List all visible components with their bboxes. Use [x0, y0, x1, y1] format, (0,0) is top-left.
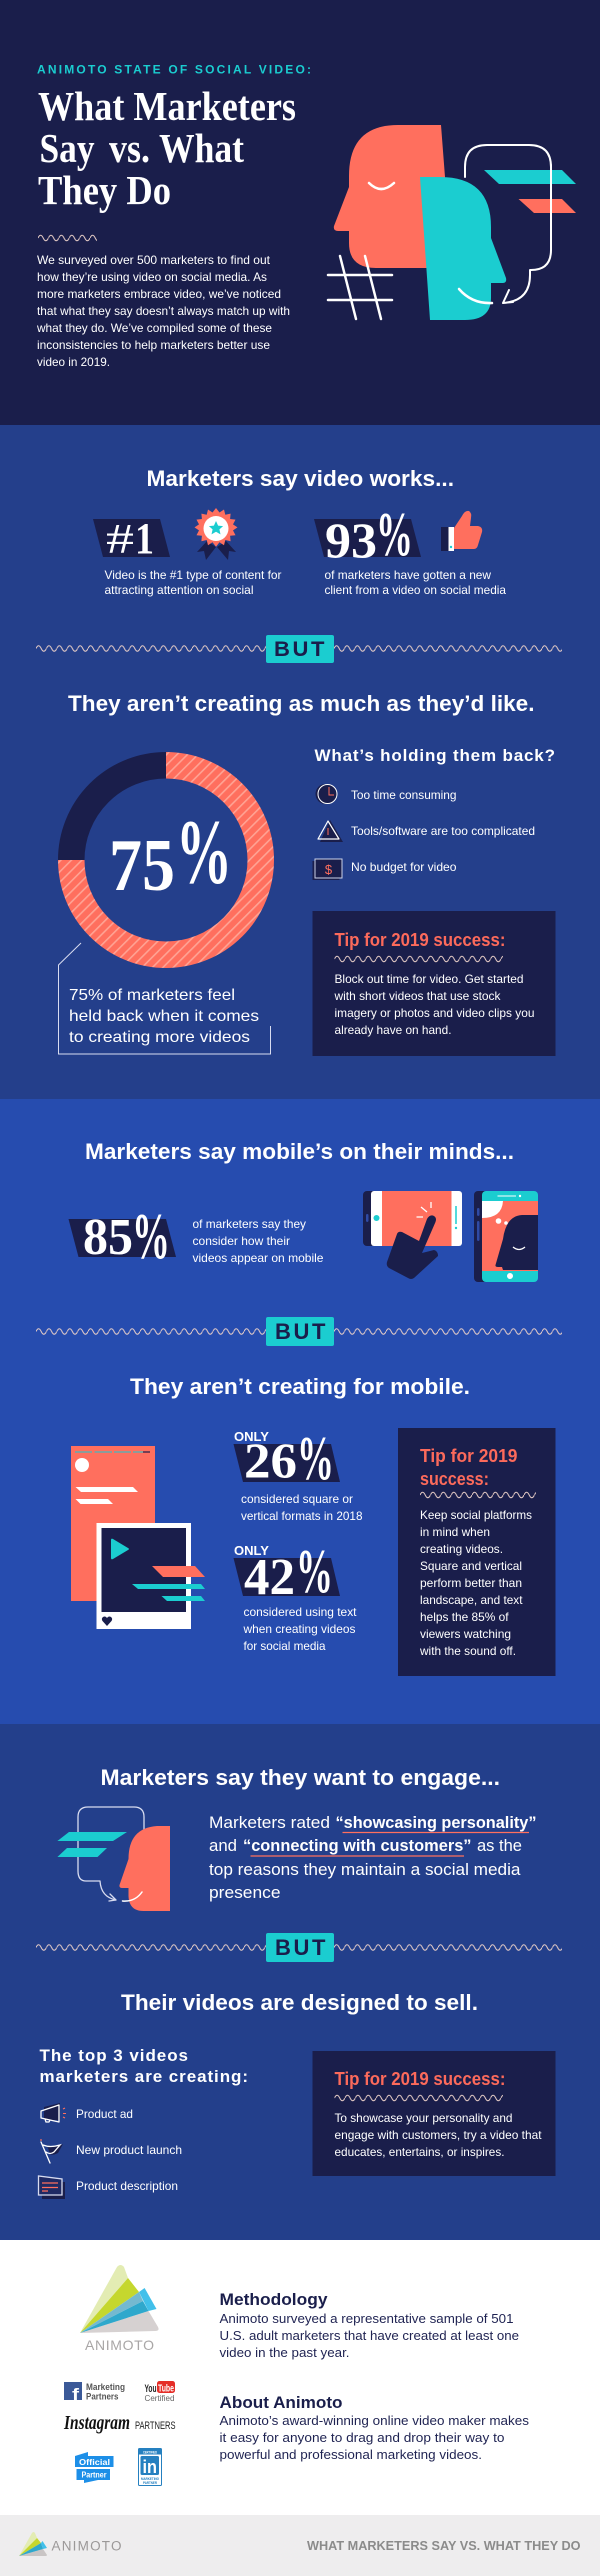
panel: tip one: imagery or photos and video clips you	[334, 1006, 534, 1020]
illustration: social feed and video post	[71, 1446, 205, 1629]
footer title: WHAT MARKETERS SAY VS. WHAT THEY DO	[307, 2539, 581, 2553]
heading: Marketers say they want to engage...	[100, 1765, 500, 1790]
text: 85 percent: of marketers say they	[192, 1217, 306, 1231]
logo: small animoto	[19, 2532, 122, 2556]
text: engagement: presence	[209, 1883, 280, 1902]
intro text: We surveyed over 500 marketers to find out	[37, 253, 271, 267]
panel: tip one: with short videos that use stock	[334, 989, 501, 1003]
stat: number one: attracting attention on social	[104, 583, 254, 597]
icon: flag	[40, 2139, 63, 2163]
panel: tip one	[312, 911, 556, 1056]
stat: 42 percent: when creating videos	[243, 1622, 356, 1636]
text: engagement: as the	[477, 1836, 522, 1855]
callout: 75 percent: to creating more videos	[69, 1029, 250, 1046]
text: engagement: “showcasing personality”	[336, 1813, 536, 1832]
teal bar	[484, 170, 576, 184]
panel: tip one: Tip for 2019 success:	[334, 930, 506, 950]
panel: tip three: educates, entertains, or inspires.	[334, 2145, 504, 2159]
icon: dollar	[312, 859, 342, 880]
text: methodology: Animoto surveyed a representative sample of 501	[220, 2312, 514, 2326]
title	[38, 83, 296, 213]
badge: facebook marketing partners: f	[72, 2385, 79, 2404]
badge: linkedin marketing partner: in	[142, 2457, 157, 2477]
divider: but	[36, 1317, 562, 1346]
text: tools too complicated: Tools/software are too complicated	[351, 824, 535, 838]
donut chart: 75 percent: 75	[109, 825, 175, 907]
badge: facebook marketing partners	[64, 2382, 125, 2404]
stat: number one	[93, 514, 282, 597]
divider: but	[36, 1933, 562, 1962]
text: about animoto: powerful and professional marketing videos.	[220, 2448, 482, 2462]
badge: instagram partners: Instagram	[63, 2412, 130, 2434]
subheading: top videos	[40, 2046, 248, 2086]
stat: 85 percent: %	[132, 1200, 170, 1273]
subheading: top videos: marketers are creating:	[40, 2067, 248, 2086]
badge: linkedin marketing partner: PARTNER	[143, 2481, 158, 2485]
panel: tip two: creating videos.	[420, 1542, 503, 1556]
text: product ad: Product ad	[76, 2107, 133, 2121]
stat: 85 percent	[68, 1200, 176, 1273]
stat: 26 percent: considered square or	[241, 1492, 353, 1506]
badge: youtube certified: You	[144, 2383, 156, 2395]
stat: 26 percent: vertical formats in 2018	[241, 1509, 363, 1523]
panel: tip three	[312, 2051, 556, 2176]
text: methodology	[220, 2290, 519, 2360]
text: 85 percent	[192, 1217, 324, 1265]
text: new product launch: New product launch	[76, 2143, 182, 2157]
panel: tip two: in mind when	[420, 1525, 490, 1539]
badge: facebook marketing partners: Partners	[86, 2392, 118, 2402]
intro text: how they’re using video on social media. As	[37, 270, 267, 284]
stat: 93 percent: 93	[325, 512, 377, 568]
title: vs.	[109, 125, 150, 171]
illustration: two heads and speech bubble	[328, 125, 576, 320]
icon: megaphone	[41, 2103, 66, 2122]
icon: clock	[316, 784, 337, 804]
panel: tip two: viewers watching	[420, 1627, 511, 1641]
heading: They aren’t creating as much as they’d like.	[68, 691, 534, 716]
intro text: inconsistencies to help marketers better use	[37, 338, 270, 352]
panel: mobile	[0, 1099, 600, 1724]
kicker: ANIMOTO STATE OF SOCIAL VIDEO:	[37, 62, 311, 76]
speech bubble	[465, 145, 551, 303]
panel: footer	[0, 2515, 600, 2576]
badge: youtube certified: Tube	[158, 2382, 174, 2394]
icon: dollar: $	[325, 862, 333, 877]
text: engagement: Marketers rated	[209, 1813, 330, 1832]
panel: tip two: success:	[420, 1469, 489, 1489]
stat: 42 percent: for social media	[244, 1639, 326, 1653]
panel: tip two: perform better than	[420, 1576, 522, 1590]
text: engagement	[209, 1813, 536, 1902]
heading: Marketers say mobile’s on their minds...	[85, 1139, 514, 1164]
stat: 42 percent: %	[296, 1538, 333, 1606]
coral bar	[518, 199, 576, 213]
text: methodology: U.S. adult marketers that have created at least one	[220, 2329, 519, 2343]
badge: twitter official partner	[75, 2452, 114, 2483]
intro text: more marketers embrace video, we’ve noticed	[37, 287, 281, 301]
panel: tip one: Block out time for video. Get started	[334, 972, 524, 986]
intro text: what they do. We’ve compiled some of these	[36, 321, 272, 335]
text: methodology: video in the past year.	[220, 2346, 350, 2360]
badge: facebook marketing partners: Marketing	[86, 2382, 125, 2393]
text: about animoto: Animoto’s award-winning online video maker makes	[220, 2414, 529, 2428]
intro text: that what they say doesn’t always match up with	[37, 304, 290, 318]
stat: 26 percent: ONLY	[234, 1430, 270, 1444]
text: about animoto: About Animoto	[220, 2393, 342, 2412]
badge: twitter official partner: Partner	[82, 2470, 106, 2480]
badge: twitter official partner: Official	[79, 2458, 110, 2467]
panel: tip two: Tip for 2019	[420, 1446, 518, 1466]
logo: animoto: ANIMOTO	[85, 2337, 154, 2353]
text: too time consuming: Too time consuming	[351, 788, 456, 802]
stat: 42 percent	[234, 1538, 357, 1653]
heading: Marketers say video works...	[146, 466, 454, 491]
stat: number one: Video is the #1 type of content for	[104, 568, 282, 582]
badge: youtube certified: Certified	[144, 2393, 175, 2403]
text: about animoto	[220, 2393, 529, 2462]
divider: but: BUT	[274, 637, 325, 661]
text: about animoto: it easy for anyone to drag and drop their way to	[220, 2431, 505, 2445]
stat: 93 percent	[314, 501, 506, 597]
text: 85 percent: consider how their	[192, 1234, 290, 1248]
intro text	[36, 253, 290, 369]
panel: tip two: Square and vertical	[420, 1559, 522, 1573]
panel: video works	[0, 425, 600, 1099]
panel: about	[0, 2240, 600, 2515]
divider: but: BUT	[275, 1319, 326, 1344]
teal head	[420, 177, 506, 320]
divider: but	[36, 635, 562, 663]
stat: 93 percent: %	[376, 501, 413, 569]
stat: 26 percent: 26	[244, 1432, 297, 1488]
badge: linkedin marketing partner: MARKETING	[141, 2477, 159, 2481]
stat: 93 percent: client from a video on social media	[324, 583, 506, 597]
stat: number one: 1	[135, 514, 154, 563]
text: engagement: and	[209, 1836, 237, 1855]
donut chart: 75 percent	[71, 765, 261, 955]
panel: hero	[0, 0, 600, 425]
divider: but: BUT	[275, 1935, 326, 1960]
title: Say	[40, 125, 95, 171]
panel: engage	[0, 1724, 600, 2240]
donut chart: 75 percent: %	[176, 801, 232, 903]
badge: instagram partners: PARTNERS	[135, 2420, 176, 2432]
stat: 85 percent: 85	[83, 1209, 133, 1266]
callout: 75 percent	[58, 943, 270, 1054]
panel: tip three: Tip for 2019 success:	[334, 2069, 506, 2089]
text: product description: Product description	[76, 2179, 178, 2193]
subheading: top videos: The top 3 videos	[40, 2046, 188, 2065]
panel: tip two: landscape, and text	[420, 1593, 523, 1607]
panel: tip two	[398, 1428, 556, 1676]
icon: thumbs up	[441, 511, 482, 551]
logo: animoto	[80, 2265, 159, 2353]
stat: 42 percent: ONLY	[234, 1544, 270, 1558]
icon: document	[38, 2176, 65, 2199]
heading: Their videos are designed to sell.	[121, 1990, 478, 2015]
stat: 42 percent: considered using text	[244, 1605, 357, 1619]
icon: portrait phone	[474, 1191, 538, 1282]
badge: linkedin marketing partner	[138, 2448, 162, 2486]
stat: 26 percent: %	[297, 1425, 334, 1493]
callout: 75 percent: 75% of marketers feel	[69, 987, 235, 1004]
stat: 26 percent	[234, 1425, 363, 1523]
text: engagement: “connecting with customers”	[243, 1836, 472, 1855]
intro text: video in 2019.	[37, 355, 110, 369]
hashtag	[328, 256, 392, 319]
icon: award ribbon	[194, 508, 238, 560]
logo: small animoto: ANIMOTO	[52, 2538, 122, 2554]
heading: They aren’t creating for mobile.	[130, 1374, 470, 1399]
panel: tip two: helps the 85% of	[420, 1610, 509, 1624]
title: They Do	[38, 167, 171, 213]
heading: holding back: What’s holding them back?	[314, 746, 555, 765]
text: methodology: Methodology	[220, 2290, 328, 2309]
panel: tip three: engage with customers, try a video that	[334, 2128, 542, 2142]
icon: landscape phone with tapping hand	[363, 1191, 462, 1279]
stat: 42 percent: 42	[244, 1549, 295, 1606]
panel: tip two: with the sound off.	[419, 1644, 516, 1658]
badge: linkedin marketing partner: CERTIFIED	[143, 2450, 157, 2454]
coral head	[334, 125, 445, 268]
callout: 75 percent: held back when it comes	[69, 1008, 259, 1025]
text: 85 percent: videos appear on mobile	[192, 1251, 324, 1265]
stat: number one: #	[106, 517, 134, 563]
text: no budget: No budget for video	[351, 860, 457, 874]
title: What	[159, 125, 244, 171]
title: What Marketers	[38, 83, 296, 129]
text: engagement: top reasons they maintain a social media	[209, 1860, 521, 1879]
panel: tip one: already have on hand.	[334, 1023, 452, 1037]
icon: warning	[318, 820, 343, 842]
panel: tip two: Keep social platforms	[420, 1508, 532, 1522]
stat: 93 percent: of marketers have gotten a new	[324, 568, 491, 582]
illustration: head and speech bubble	[57, 1807, 170, 1911]
intro squiggle	[38, 234, 97, 242]
panel: tip three: To showcase your personality and	[334, 2111, 512, 2125]
badge: youtube certified	[144, 2381, 175, 2403]
